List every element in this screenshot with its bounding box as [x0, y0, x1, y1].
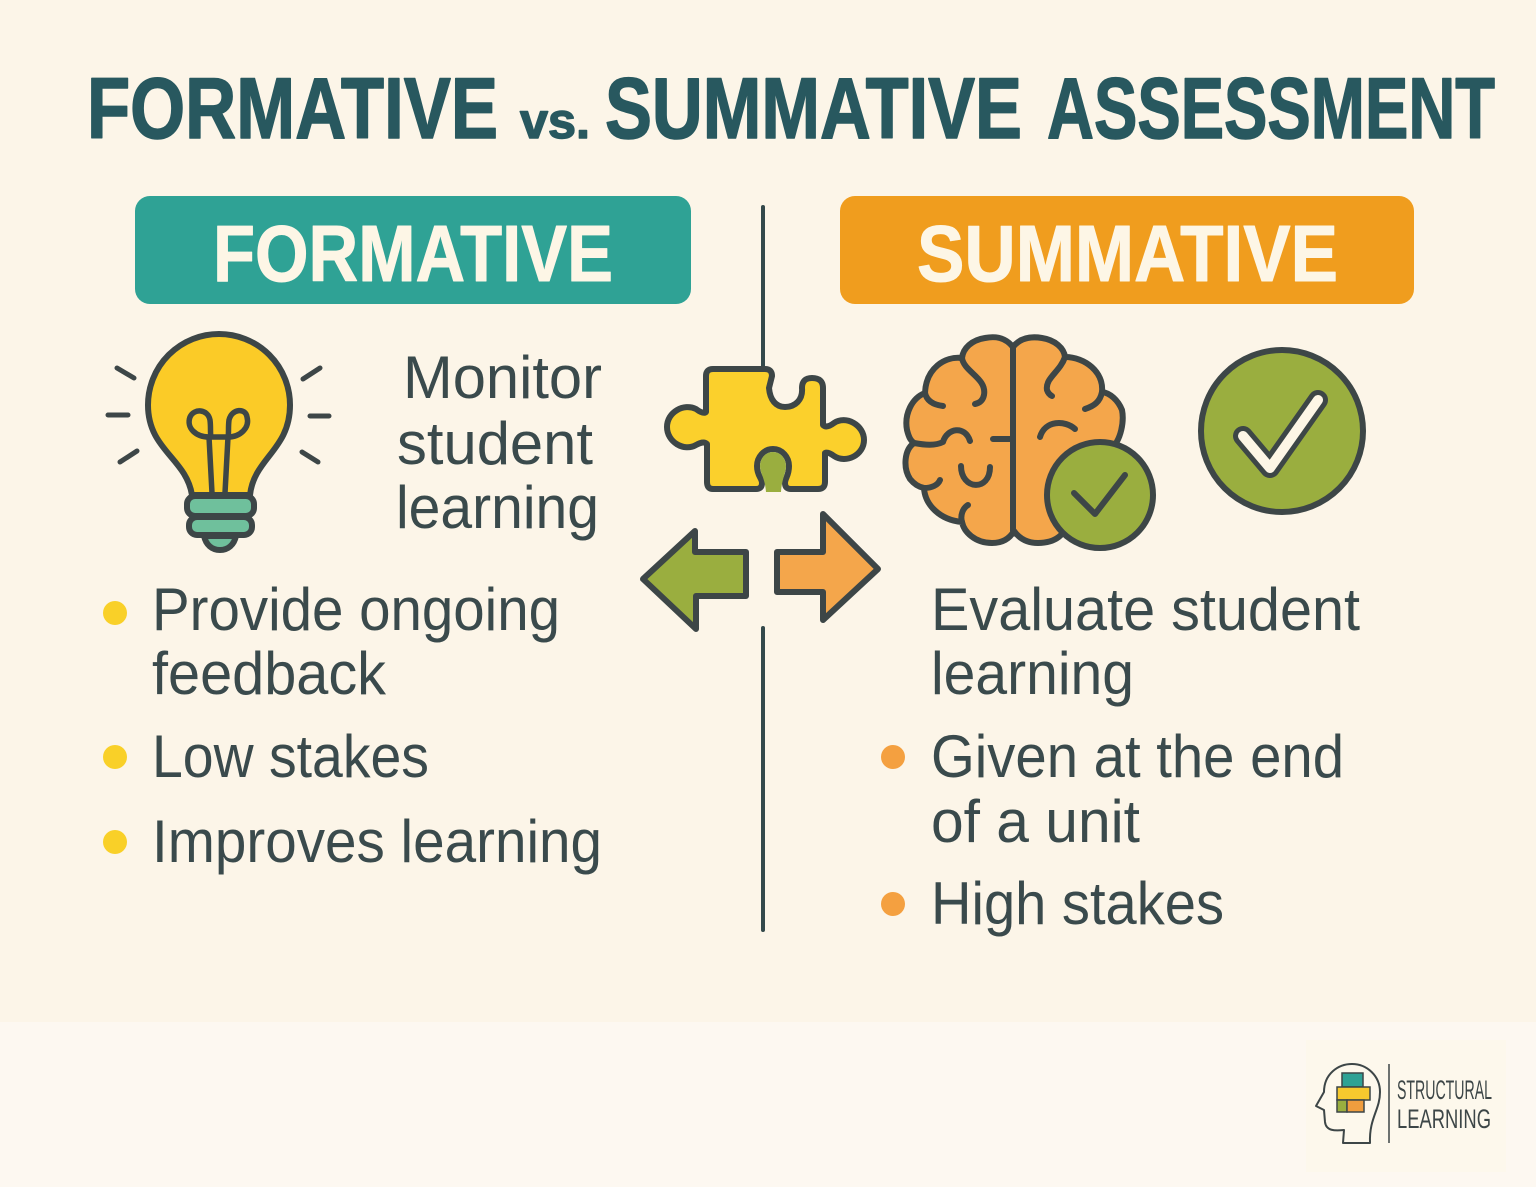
icon: puzzle piece [667, 369, 864, 492]
formative header [135, 196, 691, 304]
title [87, 61, 1495, 157]
text: monitor student learning: learning [396, 474, 599, 541]
panel: formative [103, 196, 691, 875]
bullet list: formative [103, 576, 602, 875]
icon: check circle [1201, 350, 1363, 512]
icon: left arrow [643, 531, 746, 629]
panel: summative [840, 196, 1414, 937]
bullet list: summative: Evaluate student [931, 576, 1360, 643]
summative header: SUMMATIVE [917, 209, 1338, 298]
text: monitor student learning: Monitor [403, 344, 602, 411]
bullet list: summative: learning [931, 640, 1134, 707]
bullet list: formative: Low stakes [152, 723, 429, 790]
center divider [761, 207, 765, 930]
title: SUMMATIVE [605, 61, 1022, 157]
logo: structural learning: LEARNING [1397, 1104, 1491, 1134]
title: vs. [520, 93, 590, 149]
bullet list: summative: High stakes [931, 870, 1224, 937]
logo: structural learning [1306, 1040, 1506, 1172]
icon: light bulb [108, 334, 329, 550]
bullet list: summative [881, 576, 1360, 937]
text: monitor student learning [396, 344, 602, 541]
bullet list: summative: of a unit [931, 788, 1140, 855]
icon: brain with check [905, 337, 1153, 548]
text: monitor student learning: student [397, 410, 593, 477]
formative header: FORMATIVE [213, 209, 613, 298]
bullet list: formative: Provide ongoing [152, 576, 560, 643]
bullet list: formative: Improves learning [152, 808, 602, 875]
bullet list: formative: feedback [152, 640, 387, 707]
summative header [840, 196, 1414, 304]
icon: right arrow [777, 514, 878, 620]
bullet list: summative: Given at the end [931, 723, 1344, 790]
title: FORMATIVE [87, 61, 498, 157]
